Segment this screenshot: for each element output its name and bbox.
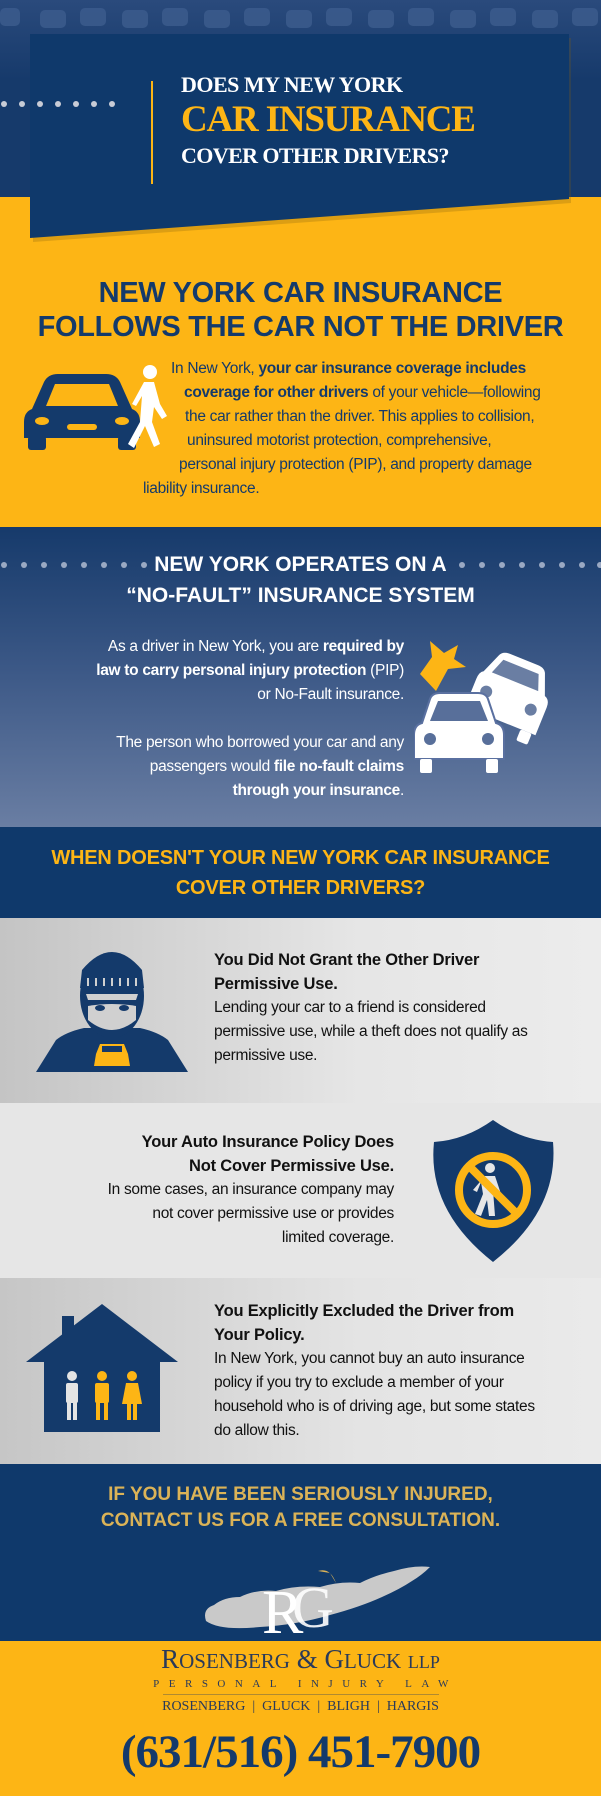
text: follows the car: [143, 360, 541, 497]
text: follows the car: In New York, your car insurance coverage includes: [171, 360, 526, 377]
header background: [0, 0, 601, 200]
text: policy: not cover permissive use or provides: [152, 1205, 394, 1222]
heading: follows the car: FOLLOWS THE CAR NOT THE DRIVER: [38, 311, 563, 343]
heading: follows the car: [38, 277, 563, 343]
panel: permissive use: [0, 918, 601, 1103]
text: policy: limited coverage.: [282, 1229, 394, 1246]
text: excluded: [214, 1302, 535, 1439]
heading: follows the car: NEW YORK CAR INSURANCE: [99, 277, 502, 309]
cta text: IF YOU HAVE BEEN SERIOUSLY INJURED,: [108, 1484, 493, 1505]
title text: COVER OTHER DRIVERS?: [181, 143, 449, 168]
logo: island with RG: G: [292, 1575, 334, 1640]
icon: shield with no pedestrian: [433, 1120, 554, 1262]
text: no-fault: The person who borrowed your car and any: [116, 734, 404, 751]
firm name: ROSENBERG & GLUCK LLP: [161, 1644, 440, 1674]
panel: excluded driver: [0, 1278, 601, 1464]
cta text: [101, 1484, 500, 1531]
title box: [1, 34, 571, 242]
title text: [181, 72, 475, 168]
text: excluded: You Explicitly Excluded the Driver from: [214, 1302, 514, 1320]
cta text: CONTACT US FOR A FREE CONSULTATION.: [101, 1510, 500, 1531]
text: policy: Not Cover Permissive Use.: [189, 1157, 394, 1175]
heading: no-fault: [126, 553, 475, 607]
background pattern: cars: [0, 8, 598, 28]
text: no-fault: passengers would file no-fault claims: [150, 758, 404, 775]
icon: car and walking person: [24, 365, 167, 450]
title text: DOES MY NEW YORK: [181, 72, 403, 97]
dots decoration: [1, 562, 601, 568]
text: permissive use: permissive use.: [214, 1047, 317, 1064]
text: no-fault: [96, 638, 404, 799]
text: excluded: Your Policy.: [214, 1326, 305, 1344]
heading: no-fault: “NO-FAULT” INSURANCE SYSTEM: [126, 584, 475, 607]
text: no-fault: As a driver in New York, you are required by: [108, 638, 404, 655]
partners: ROSENBERG | GLUCK | BLIGH | HARGIS: [162, 1699, 439, 1714]
heading: no-fault: NEW YORK OPERATES ON A: [154, 553, 447, 576]
text: follows the car: coverage for other drivers of your vehicle—following: [184, 384, 541, 401]
text: no-fault: through your insurance.: [233, 782, 404, 799]
text: policy: In some cases, an insurance company may: [108, 1181, 394, 1198]
title text: CAR INSURANCE: [181, 99, 475, 140]
text: permissive use: Lending your car to a friend is considered: [214, 999, 486, 1016]
heading band: when doesn't: [0, 827, 601, 919]
heading band: when doesn't: WHEN DOESN'T YOUR NEW YORK CAR INSURANCE: [51, 847, 550, 869]
icon: robber: [36, 952, 188, 1072]
footer: firm name and phone: [0, 1641, 601, 1796]
icon: house with family: [26, 1304, 178, 1432]
text: no-fault: law to carry personal injury protection (PIP): [96, 662, 404, 679]
panel: policy doesn't cover: [0, 1103, 601, 1278]
text: no-fault: or No-Fault insurance.: [257, 686, 404, 703]
text: policy: Your Auto Insurance Policy Does: [142, 1133, 394, 1151]
text: follows the car: liability insurance.: [143, 480, 259, 497]
footer: call to action: [0, 1464, 601, 1641]
text: permissive use: Permissive Use.: [214, 975, 338, 993]
icon: car crash: [414, 641, 548, 773]
text: permissive use: [214, 951, 528, 1064]
yellow section background: [0, 197, 601, 528]
text: excluded: do allow this.: [214, 1422, 299, 1439]
panel: no-fault: [0, 527, 601, 828]
text: excluded: policy if you try to exclude a member of your: [214, 1374, 504, 1391]
text: policy: [108, 1133, 394, 1246]
text: follows the car: uninsured motorist protection, comprehensive,: [187, 432, 491, 449]
heading band: when doesn't: COVER OTHER DRIVERS?: [176, 877, 425, 899]
text: follows the car: the car rather than the driver. This applies to collision,: [185, 408, 534, 425]
text: excluded: In New York, you cannot buy an auto insurance: [214, 1350, 524, 1367]
text: permissive use: You Did Not Grant the Other Driver: [214, 951, 479, 969]
tagline: PERSONAL INJURY LAW: [153, 1678, 458, 1690]
text: follows the car: personal injury protection (PIP), and property damage: [179, 456, 532, 473]
text: permissive use: permissive use, while a theft does not qualify as: [214, 1023, 528, 1040]
logo: island with RG: [205, 1566, 430, 1641]
phone: (631/516) 451-7900: [121, 1726, 480, 1778]
text: excluded: household who is of driving age, but some states: [214, 1398, 535, 1415]
